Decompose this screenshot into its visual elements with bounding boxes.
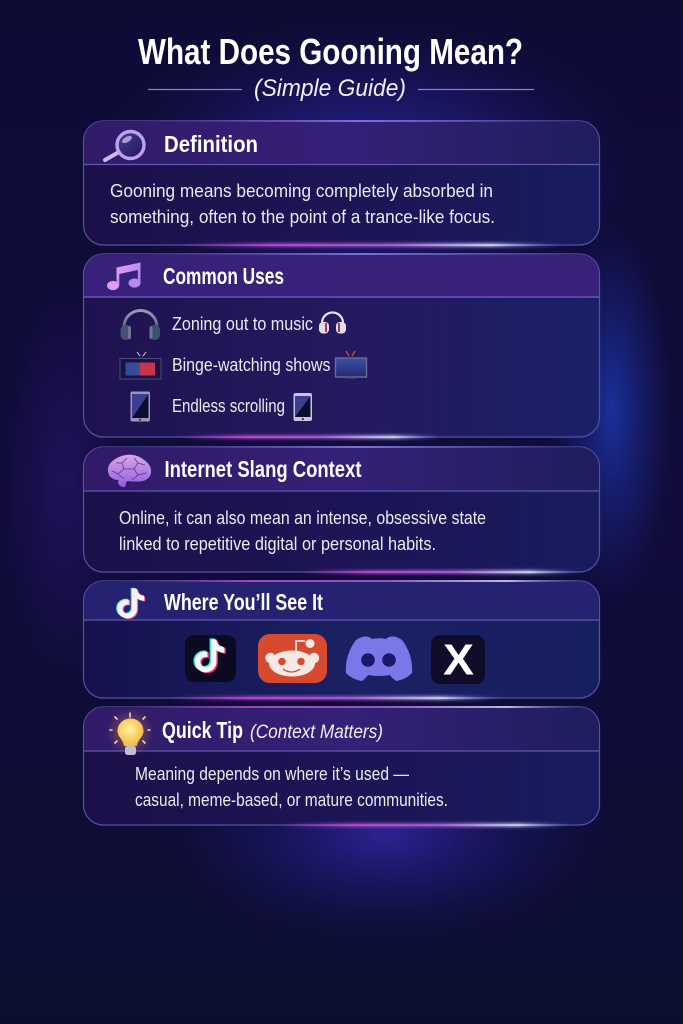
heading: where you'll see it: Where You’ll See It xyxy=(164,589,323,615)
icon: phone xyxy=(294,393,312,421)
panel: definition xyxy=(84,120,600,246)
text: quick tip body xyxy=(135,763,448,810)
heading: definition: Definition xyxy=(164,131,258,157)
icon: tablet xyxy=(130,392,150,422)
icon: brain xyxy=(108,455,151,487)
icon: light bulb xyxy=(106,708,154,756)
text: binge watching: Binge-watching shows xyxy=(172,354,330,375)
text: context matters: (Context Matters) xyxy=(250,722,383,743)
icon: magnifying glass xyxy=(105,132,144,160)
text: definition body: something, often to the point of a trance-like focus. xyxy=(110,206,495,227)
panel: common uses xyxy=(84,253,600,438)
panel: internet slang context xyxy=(84,446,600,574)
text: definition body: Gooning means becoming completely absorbed in xyxy=(110,180,493,201)
text: internet slang body: Online, it can also mean an intense, obsessive state xyxy=(119,507,486,528)
icon: white headphones xyxy=(319,312,346,334)
icon: x: X xyxy=(443,636,474,684)
icon: grey headphones xyxy=(120,310,160,340)
heading: common uses: Common Uses xyxy=(163,263,284,289)
icon: tiktok xyxy=(185,635,236,682)
icon: reddit xyxy=(258,634,327,683)
panel: quick tip xyxy=(84,706,600,826)
icon: music note xyxy=(107,262,140,290)
subtitle: (Simple Guide) xyxy=(254,75,406,102)
heading: internet slang context: Internet Slang Context xyxy=(164,456,362,482)
icon: red blue tv xyxy=(120,352,161,379)
text: internet slang body xyxy=(119,507,486,554)
title: What Does Gooning Mean? xyxy=(138,31,523,72)
icon: discord xyxy=(346,636,412,681)
text: endless scrolling: Endless scrolling xyxy=(172,395,285,416)
text: internet slang body: linked to repetitive digital or personal habits. xyxy=(119,533,436,554)
text: zoning out: Zoning out to music xyxy=(172,313,313,334)
text: definition body xyxy=(110,180,495,227)
heading: quick tip: Quick Tip xyxy=(162,717,243,743)
text: quick tip body: casual, meme-based, or mature communities. xyxy=(135,789,448,810)
icon: tiktok header xyxy=(116,588,145,619)
text: quick tip body: Meaning depends on where it’s used — xyxy=(135,763,409,784)
panel: where you'll see it xyxy=(84,580,600,700)
icon: x xyxy=(431,635,485,684)
icon: blue tv xyxy=(336,351,366,378)
